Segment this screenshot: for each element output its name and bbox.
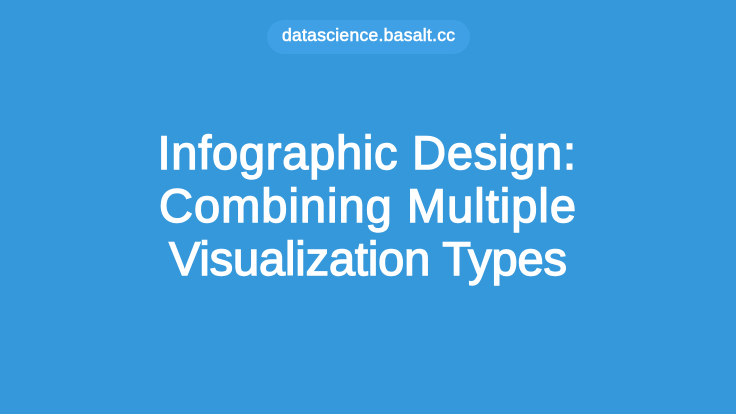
title: Combining Multiple bbox=[159, 179, 576, 232]
badge: site name pill bbox=[267, 20, 470, 54]
badge: site name pill: datascience.basalt.cc bbox=[282, 25, 455, 45]
title bbox=[158, 126, 576, 285]
title: Visualization Types bbox=[169, 232, 567, 285]
title: Infographic Design: bbox=[158, 126, 576, 179]
